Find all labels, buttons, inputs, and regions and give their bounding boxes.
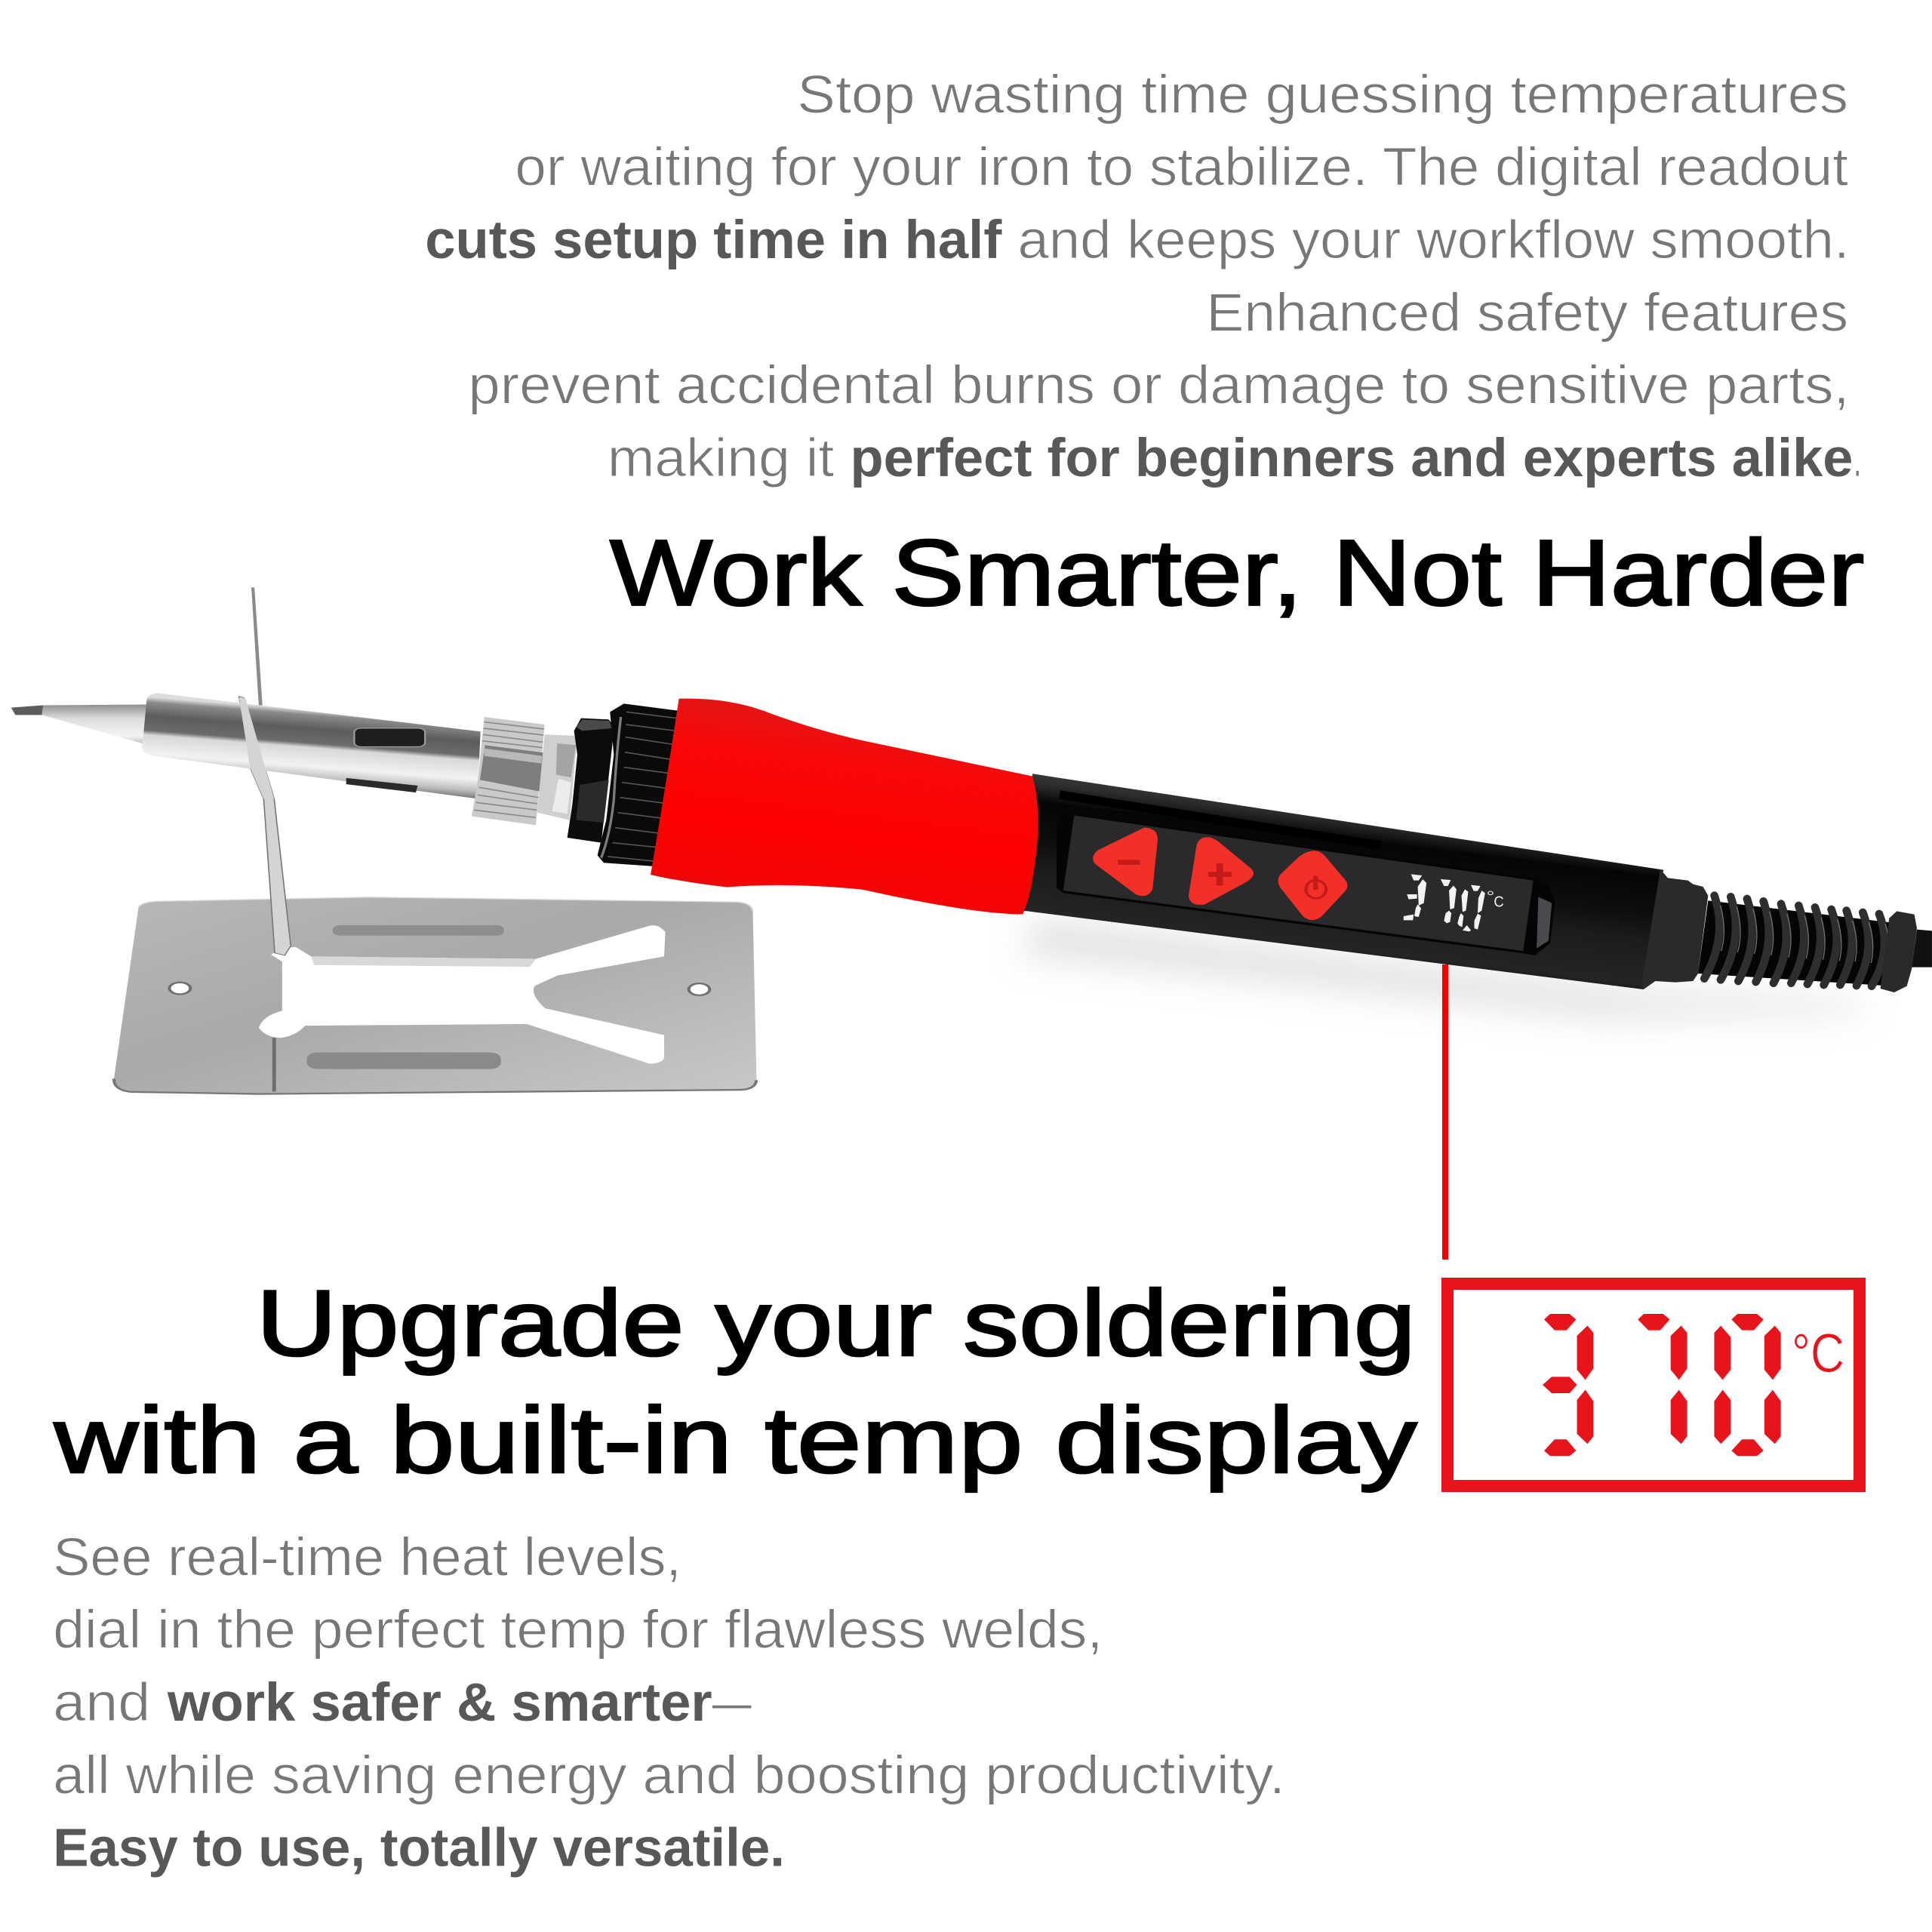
heading: upgrade your soldering: with a built-in temp display xyxy=(54,1389,1417,1493)
text block: top paragraph: making it xyxy=(608,428,834,488)
heading: upgrade your soldering: Upgrade your soldering xyxy=(257,1272,1416,1376)
iron red grip xyxy=(651,699,1038,914)
iron metal tip and barrel xyxy=(11,693,481,798)
text block: top paragraph: prevent accidental burns or damage to sensitive parts, xyxy=(468,355,1850,416)
text block: top paragraph xyxy=(425,64,1862,488)
raised slots xyxy=(333,925,504,936)
large seven-segment digits xyxy=(1543,1314,1781,1456)
heading: work smarter: Work Smarter, Not Harder xyxy=(610,521,1864,626)
text block: top paragraph: and keeps your workflow smooth. xyxy=(1018,210,1850,270)
small temperature readout xyxy=(1404,874,1485,931)
mounting holes xyxy=(169,983,190,994)
product: soldering stand xyxy=(114,587,756,1094)
text block: top paragraph: Enhanced safety features xyxy=(1206,282,1848,343)
text block: top paragraph: . xyxy=(1854,428,1862,488)
iron shiny black ring xyxy=(568,718,614,843)
stand fold line xyxy=(272,1038,276,1091)
product: soldering iron xyxy=(11,693,1932,992)
text block: top paragraph: Stop wasting time guessing temperatures xyxy=(797,64,1848,125)
callout: temperature display xyxy=(1447,1284,1860,1486)
text block: bottom paragraph: dial in the perfect temp for flawless welds, xyxy=(53,1600,1103,1660)
iron control panel: C xyxy=(1494,894,1504,911)
text block: bottom paragraph: Easy to use, totally versatile. xyxy=(53,1818,785,1878)
heading: upgrade your soldering xyxy=(54,1272,1417,1493)
text block: bottom paragraph: all while saving energy and boosting productivity. xyxy=(53,1745,1285,1805)
iron knurled ring xyxy=(598,703,678,866)
text block: bottom paragraph: See real-time heat levels, xyxy=(53,1527,681,1587)
iron strain relief xyxy=(1641,869,1932,992)
stand base plate xyxy=(114,897,756,1094)
text block: top paragraph: perfect for beginners and experts alike xyxy=(851,428,1854,488)
text block: bottom paragraph: — xyxy=(712,1672,752,1733)
callout line xyxy=(1442,964,1448,1260)
button: plus xyxy=(1189,837,1254,905)
iron black handle xyxy=(1013,774,1663,989)
button: power xyxy=(1278,851,1347,920)
unit label: °C xyxy=(1792,1324,1844,1384)
text block: bottom paragraph: work safer & smarter xyxy=(167,1672,712,1733)
text block: top paragraph: cuts setup time in half xyxy=(425,210,1002,270)
shadow under iron xyxy=(1023,918,1873,1018)
text block: top paragraph: or waiting for your iron to stabilize. The digital readout xyxy=(515,137,1848,198)
button: minus xyxy=(1093,828,1158,896)
iron knurled nut and collars xyxy=(472,703,678,866)
spring ribs xyxy=(1704,896,1884,986)
text block: bottom paragraph xyxy=(53,1527,1285,1878)
text block: bottom paragraph: and xyxy=(53,1672,150,1733)
stand upright xyxy=(239,697,291,955)
iron control panel xyxy=(1057,810,1555,955)
